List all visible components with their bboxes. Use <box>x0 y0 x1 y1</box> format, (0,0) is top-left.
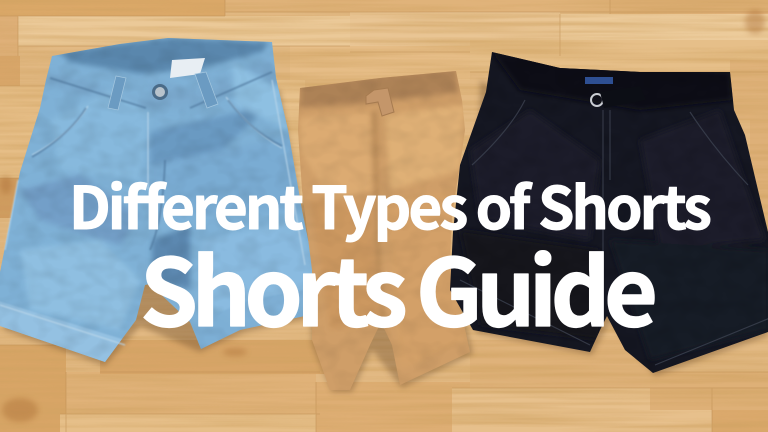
subtitle: Different Types of Shorts: Different Types of Shorts <box>69 161 712 246</box>
tan belt tab <box>366 88 394 116</box>
denim seams dark <box>32 72 282 250</box>
waistband label <box>585 77 613 84</box>
metal button <box>152 84 168 100</box>
main title: Shorts Guide: Shorts Guide <box>140 218 658 353</box>
cuffs <box>0 302 122 362</box>
tan chino shorts <box>298 71 470 390</box>
denim stitching and pockets <box>0 80 305 345</box>
belt loops <box>108 72 218 110</box>
title <box>69 161 712 353</box>
metal ring buckle <box>591 86 646 108</box>
pockets and stitching <box>460 100 768 365</box>
denim shading <box>20 38 320 330</box>
shadows under garments <box>4 70 768 392</box>
blue denim shorts <box>0 38 312 362</box>
waistband label <box>170 58 205 78</box>
black shorts <box>450 50 768 380</box>
